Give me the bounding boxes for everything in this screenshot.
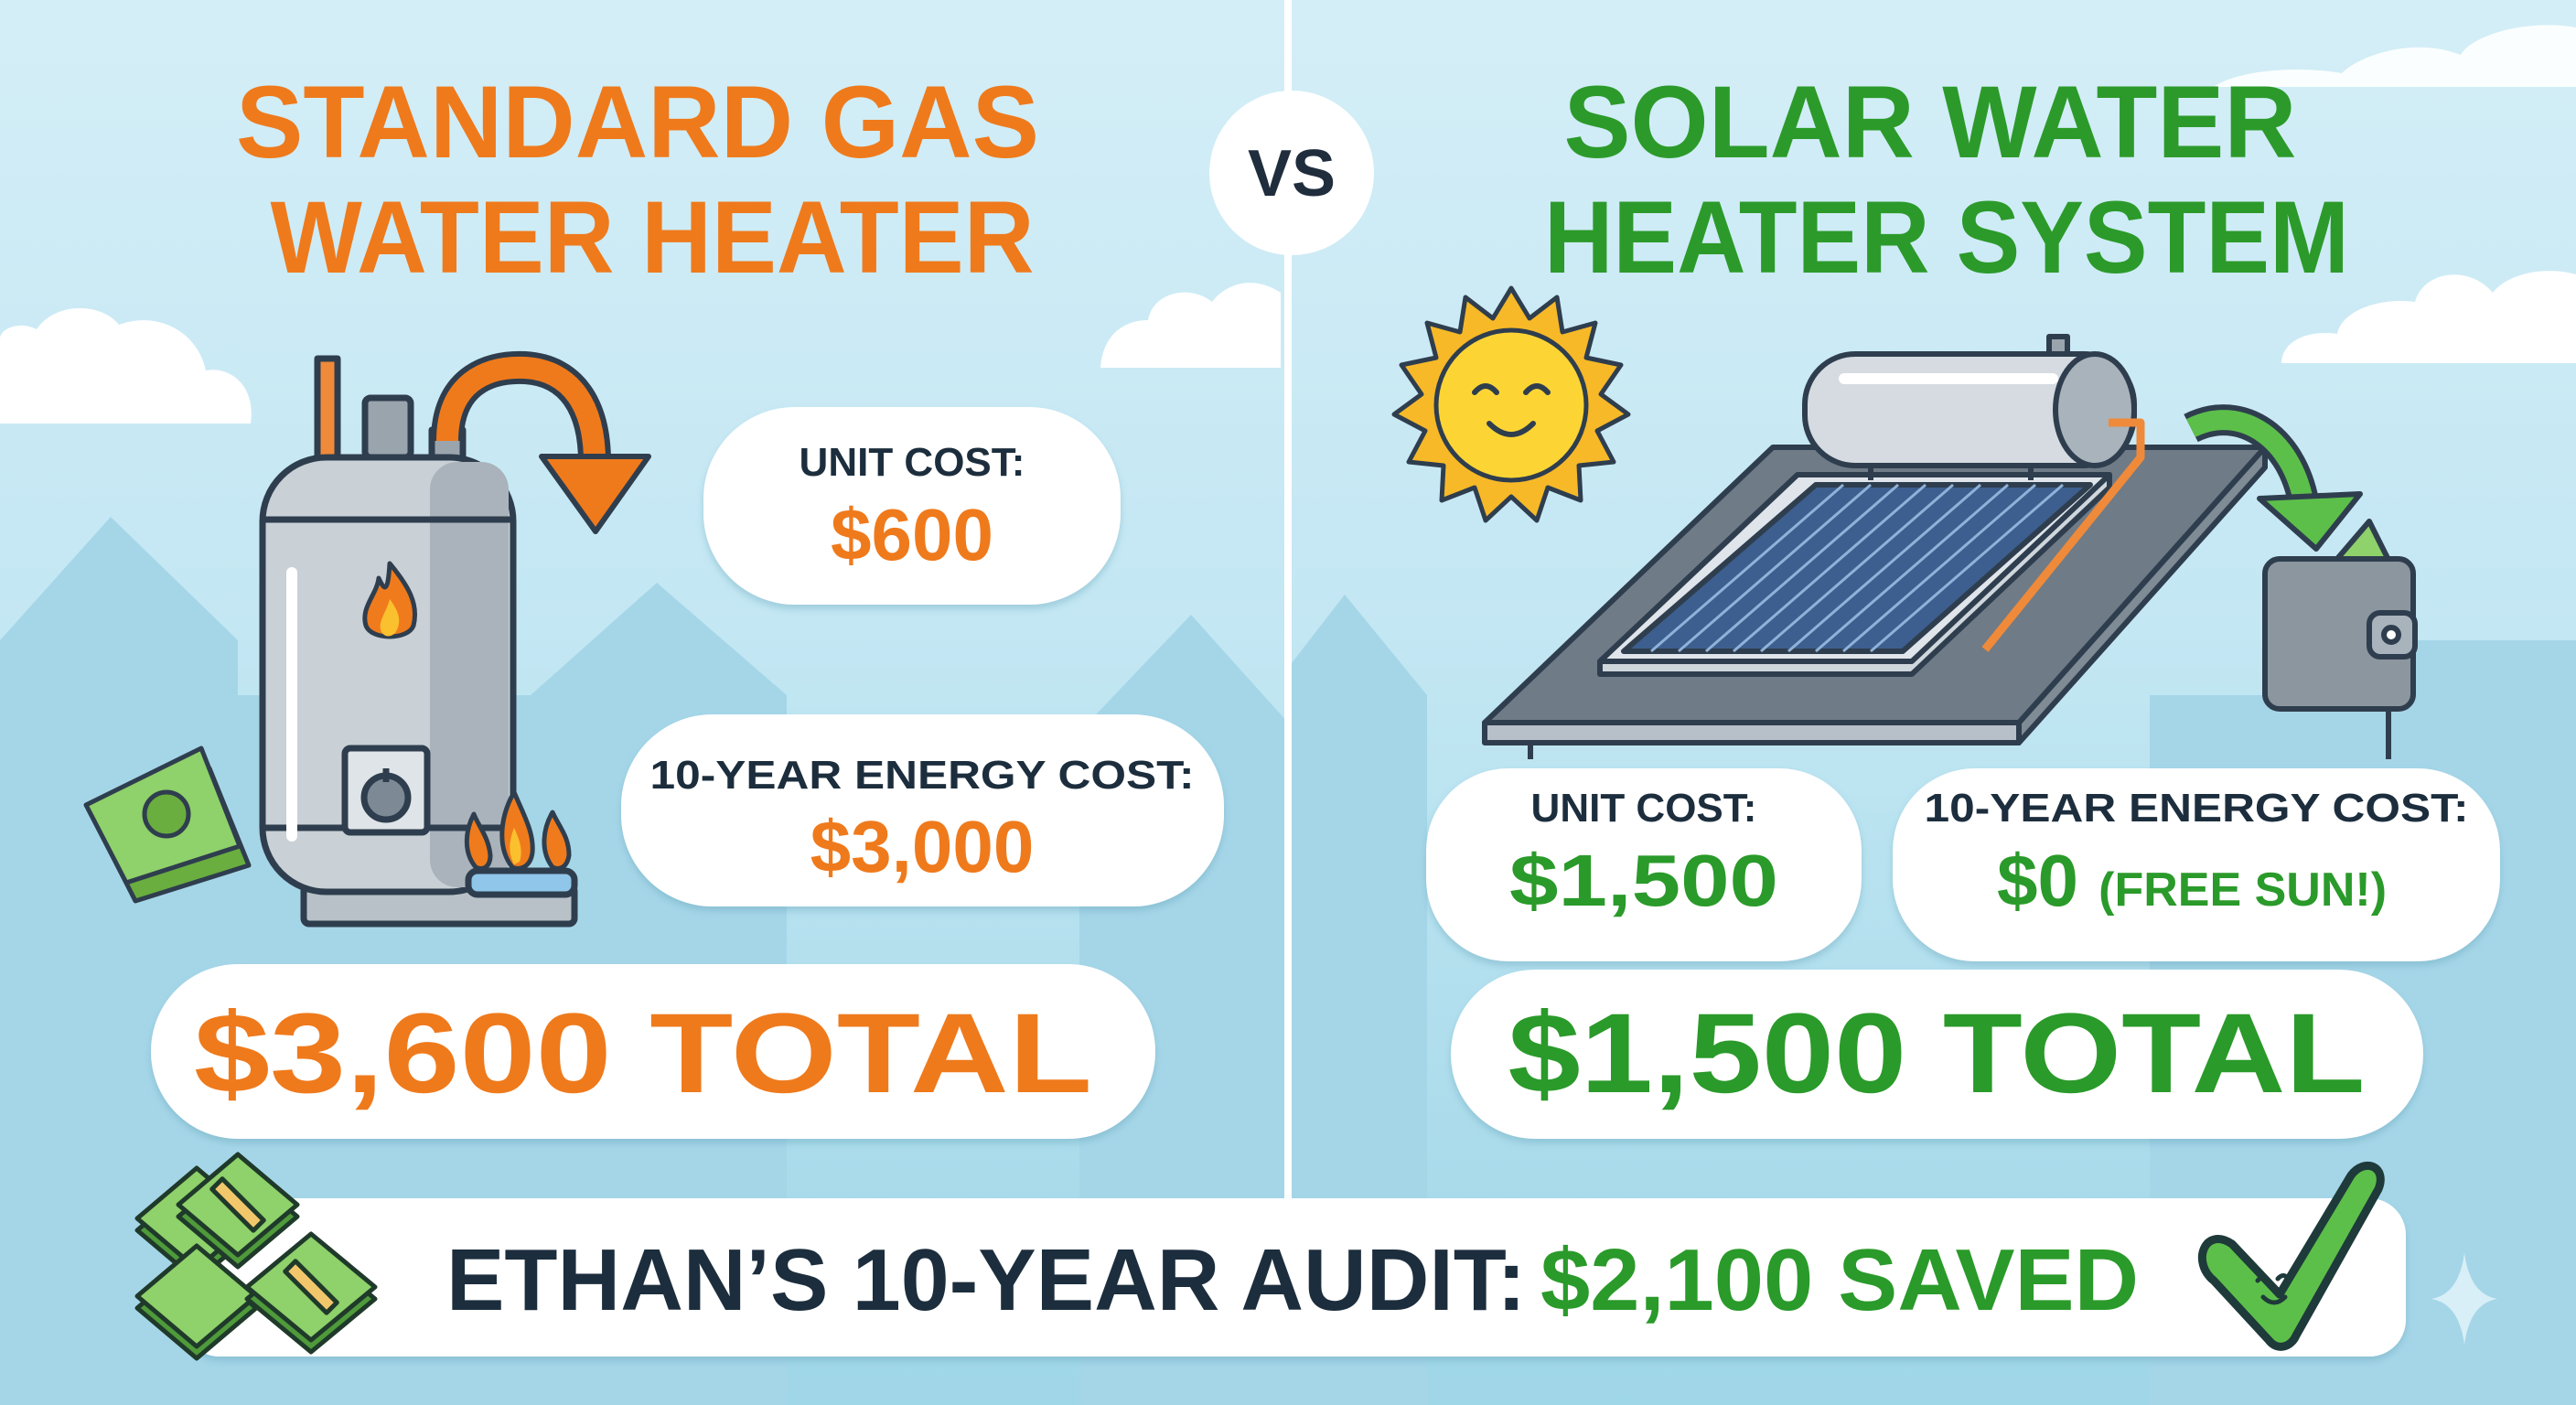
title: standard gas water heater: STANDARD GAS	[236, 65, 1039, 179]
clouds	[0, 25, 2576, 424]
panel: total gas: $3,600 TOTAL	[194, 991, 1092, 1117]
burner	[468, 871, 574, 895]
background houses	[0, 517, 2576, 1405]
icon: check mark	[2202, 1165, 2380, 1346]
panel: total solar: $1,500 TOTAL	[1508, 991, 2366, 1117]
icon: money stacks	[137, 1154, 375, 1358]
tank	[1868, 457, 1873, 480]
icon: solar water heater on roof	[1485, 337, 2388, 759]
panel: unit cost gas	[703, 407, 1121, 605]
panel: unit cost solar: $1,500	[1509, 840, 1778, 921]
icon: sparkle	[2431, 1253, 2497, 1345]
panel: unit cost gas: UNIT COST:	[800, 440, 1025, 485]
icon: gas water heater	[263, 359, 574, 924]
collector panel	[1600, 475, 2109, 674]
icon: flame on tank	[365, 563, 415, 637]
panel: energy cost solar: $0 (FREE SUN!)	[1997, 840, 2387, 921]
title: solar water heater system	[1544, 65, 2349, 295]
arrow: green curved	[2191, 420, 2360, 549]
panel: energy cost solar	[1893, 768, 2500, 961]
panel: unit cost solar	[1426, 768, 1862, 961]
panel: unit cost solar: UNIT COST:	[1531, 786, 1756, 831]
divider	[1284, 0, 1292, 1198]
icon: sun	[1394, 288, 1628, 520]
panel: total gas	[151, 964, 1155, 1139]
panel: energy cost gas: 10-YEAR ENERGY COST:	[649, 753, 1195, 798]
banner: audit savings	[183, 1198, 2406, 1357]
title: standard gas water heater	[236, 65, 1039, 295]
panel: unit cost gas: $600	[831, 494, 993, 575]
panel: energy cost solar: 10-YEAR ENERGY COST:	[1925, 786, 2468, 831]
banner: audit savings: $2,100 SAVED	[1540, 1231, 2139, 1329]
panel: energy cost gas: $3,000	[810, 806, 1034, 887]
vs badge: VS	[1248, 137, 1336, 210]
title: solar water heater system: HEATER SYSTEM	[1544, 180, 2349, 295]
banner: audit savings: ETHAN’S 10-YEAR AUDIT:	[446, 1231, 1526, 1329]
icon: money bill	[86, 748, 249, 901]
panel: total solar	[1451, 970, 2423, 1139]
arrow: orange curved	[447, 368, 649, 531]
control box	[345, 748, 427, 832]
vs badge	[1209, 91, 1374, 255]
panel: energy cost gas	[621, 714, 1224, 906]
title: solar water heater system: SOLAR WATER	[1564, 65, 2296, 179]
icon: wallet with cash	[2265, 521, 2415, 709]
title: standard gas water heater: WATER HEATER	[271, 180, 1034, 295]
